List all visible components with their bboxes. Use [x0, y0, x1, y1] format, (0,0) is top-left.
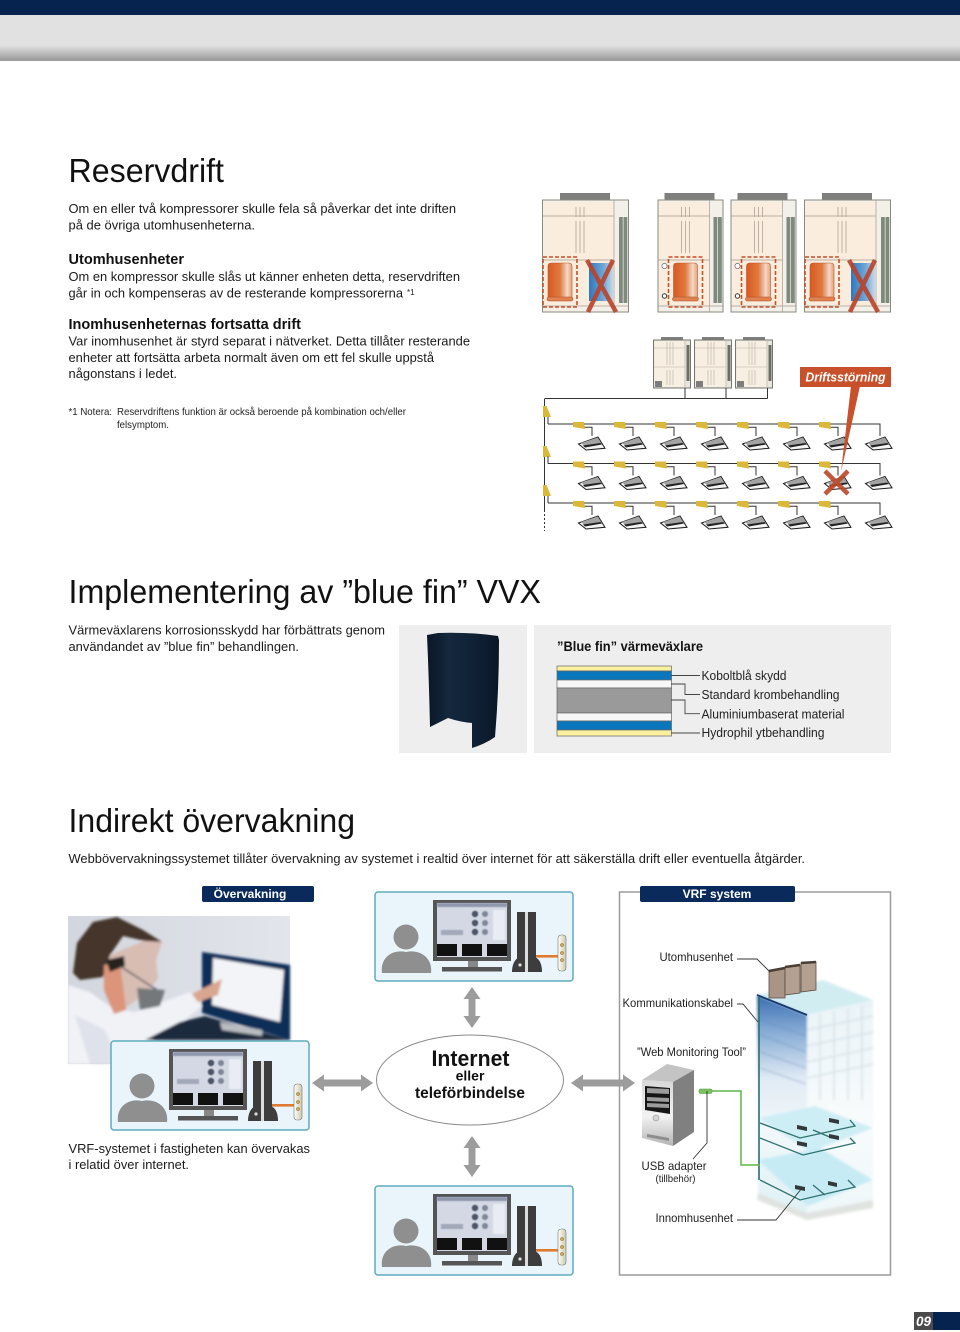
- text block: blue fin description: Värmeväxlarens korrosionsskydd har förbättrats genom: [68, 622, 385, 638]
- ellipse: Internet eller teleförbindelse: teleförbindelse: [415, 1085, 525, 1102]
- leader lines: [693, 959, 802, 1220]
- tag: Övervakning: Övervakning: [214, 886, 286, 901]
- diagram: outdoor units with compressors: [542, 193, 890, 312]
- header band: [0, 0, 960, 61]
- heading: Implementering av blue fin VVX: Implementering av ”blue fin” VVX: [68, 573, 541, 610]
- text block: Reservdrift description: Om en kompressor skulle slås ut känner enheten detta, reservdriften: [68, 269, 460, 284]
- callout: Driftsstörning: Driftsstörning: [806, 370, 886, 384]
- label: Web Monitoring Tool: ”Web Monitoring Tool”: [637, 1047, 746, 1059]
- tag: VRF system: [640, 886, 795, 902]
- text block: blue fin description: användandet av ”blue fin” behandlingen.: [68, 639, 299, 654]
- text block: monitoring description: Webbövervakningssystemet tillåter övervakning av systemet i realtid över internet för att säkerställa drift eller eventuella åtgärder.: [68, 851, 805, 866]
- arrow: right horizontal: [571, 1074, 635, 1092]
- label: Innomhusenhet: Innomhusenhet: [656, 1211, 734, 1225]
- panel: monitoring station bottom: [375, 1186, 573, 1275]
- text block: VRF caption: VRF-systemet i fastigheten kan övervakas: [68, 1141, 310, 1156]
- tag: VRF system: VRF system: [683, 887, 751, 901]
- panel: blue fin layers: [534, 625, 891, 753]
- arrow: left horizontal: [312, 1074, 373, 1092]
- panel: monitoring station left: [111, 1041, 309, 1130]
- layer labels: [702, 669, 844, 740]
- ellipse: Internet eller teleförbindelse: Internet: [432, 1046, 510, 1071]
- layer labels: Koboltblå skydd: [702, 669, 787, 683]
- footnote: *1 Notera:: [68, 406, 112, 418]
- layer labels: Aluminiumbaserat material: [702, 708, 844, 722]
- layer labels: Hydrophil ytbehandling: [702, 726, 825, 740]
- panel: heat exchanger photo: [399, 625, 527, 753]
- text block: Reservdrift description: någonstans i ledet.: [68, 366, 177, 381]
- panel title: ”Blue fin” värmeväxlare: [557, 639, 703, 654]
- label: USB adapter: (tillbehör): [656, 1174, 696, 1185]
- text block: VRF caption: i relatid över internet.: [68, 1157, 189, 1172]
- label: USB adapter: [642, 1159, 706, 1185]
- diagram: indoor unit network: [543, 398, 892, 531]
- heading: Indirekt övervakning: Indirekt övervakning: [68, 802, 355, 839]
- diagram: small outdoor units: [545, 337, 772, 398]
- ellipse: Internet eller teleförbindelse: eller: [456, 1068, 485, 1084]
- text block: Reservdrift description: [68, 201, 470, 381]
- ellipse: Internet eller teleförbindelse: [376, 1035, 564, 1125]
- footnote: [68, 406, 406, 431]
- arrow: top vertical: [464, 987, 480, 1028]
- tag: Övervakning: [202, 886, 314, 902]
- page number: [914, 1312, 960, 1330]
- footnote: Reservdriftens funktion är också beroende på kombination och/eller: [117, 406, 406, 418]
- building illustration: [757, 962, 873, 1220]
- footnote: felsymptom.: [117, 419, 169, 431]
- heading: Reservdrift: Reservdrift: [68, 152, 224, 189]
- layer leader lines: [671, 676, 700, 733]
- callout: Driftsstörning: [800, 367, 891, 494]
- layer stack: [557, 666, 672, 736]
- page number: 09: [916, 1314, 931, 1329]
- text block: Reservdrift description: *1: [407, 288, 415, 297]
- label: USB adapter: USB adapter: [642, 1159, 706, 1173]
- text block: VRF caption: [68, 1141, 310, 1172]
- text block: blue fin description: [68, 622, 385, 654]
- text block: Reservdrift description: på de övriga utomhusenheterna.: [68, 218, 255, 232]
- text block: Reservdrift description: Om en eller två kompressorer skulle fela så påverkar det inte driften: [68, 201, 456, 216]
- arrow: bottom vertical: [464, 1136, 480, 1177]
- text block: Reservdrift description: Var inomhusenhet är styrd separat i nätverket. Detta tillåter resterande: [68, 334, 470, 348]
- panel: monitoring station top: [375, 892, 573, 981]
- cable: green USB link: [699, 1089, 760, 1165]
- photo: operator at monitor: [68, 916, 290, 1064]
- text block: Reservdrift description: enheter att fortsätta arbeta normalt även om ett fel skulle uppstå: [68, 350, 435, 365]
- layer labels: Standard krombehandling: [702, 688, 840, 702]
- label: Kommunikationskabel: Kommunikationskabel: [622, 996, 733, 1010]
- panel: VRF system: [620, 886, 890, 1275]
- text block: Reservdrift description: Utomhusenheter: [68, 252, 184, 268]
- text block: Reservdrift description: går in och kompenseras av de resterande kompressorerna: [68, 286, 404, 300]
- icon: server tower: [642, 1064, 694, 1146]
- label: Utomhusenhet: Utomhusenhet: [660, 950, 734, 964]
- text block: Reservdrift description: Inomhusenheternas fortsatta drift: [68, 317, 301, 333]
